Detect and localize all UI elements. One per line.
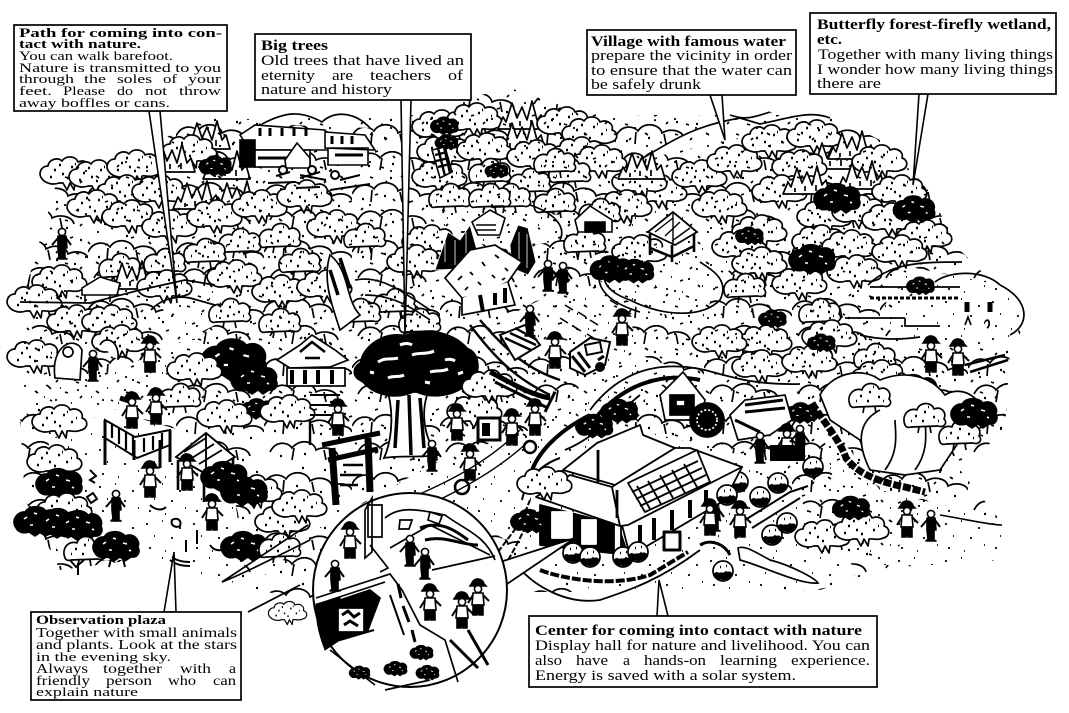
cliff and rocks on right [820, 373, 997, 475]
clearings and dotted paths [30, 200, 1028, 592]
callout: observation plaza: together [103, 661, 163, 676]
callout: butterfly forest firefly wetland: there are [817, 76, 881, 92]
callout: observation plaza: person [106, 673, 152, 688]
forest trees, back rows [7, 101, 952, 393]
callout: observation plaza: who [168, 673, 196, 688]
callout: village with famous water: be safely drunk [591, 77, 702, 93]
callout: center for coming into contact with nature: learning [720, 653, 778, 669]
temple [277, 335, 348, 386]
callout: path for coming into contact with nature: of [163, 71, 178, 86]
callout: path for coming into contact with nature: your [188, 71, 222, 86]
dark forest clumps [199, 117, 937, 423]
left hut statues [54, 336, 161, 381]
left shelter [82, 277, 120, 302]
callout: observation plaza: Observation plaza [36, 612, 167, 627]
wetland [845, 262, 1024, 339]
callout: big trees: Old trees that have lived an [261, 53, 465, 69]
dark bushes by river [576, 399, 638, 438]
callout: butterfly forest firefly wetland: Together with many living things [818, 47, 1053, 63]
callout: observation plaza: explain nature [36, 684, 138, 699]
figures on hill lawn [268, 166, 370, 190]
farm workers and jeep [500, 260, 633, 375]
gazebo on the hillside [648, 212, 697, 262]
callout: big trees: eternity [261, 68, 316, 84]
two people waving on the boardwalk [921, 336, 1008, 375]
callout: path for coming into contact with nature: feet. [19, 83, 52, 98]
plaza people [106, 454, 223, 530]
shrubs beside center building [511, 467, 737, 533]
big tree [354, 330, 502, 458]
callout: village with famous water: prepare the vicinity in order [591, 48, 792, 64]
far hills [262, 112, 830, 160]
callout: village with famous water [587, 30, 796, 140]
gazebo in the plaza [176, 433, 235, 502]
grey line meadow right [940, 515, 1002, 525]
callout: butterfly forest firefly wetland: Butterfly forest-firefly wetland, [817, 17, 1051, 33]
callout: center for coming into contact with nature: a [623, 653, 630, 669]
callout: center for coming into contact with nature [529, 580, 877, 687]
callout: path for coming into contact with nature: soles [117, 71, 152, 86]
callout: center for coming into contact with nature: Display hall for nature and livelihood. You can [535, 638, 871, 654]
callout: path for coming into contact with nature: Path for coming into con- [19, 25, 222, 40]
hedge strip [738, 547, 818, 583]
orchard round trees and fence [705, 457, 940, 581]
callout: path for coming into contact with nature: Nature is transmitted to you [19, 60, 222, 75]
callout: observation plaza: a [229, 661, 236, 676]
far left figure on ridge [52, 228, 71, 259]
callout: path for coming into contact with nature: throw [179, 83, 222, 98]
wooded landscape base [20, 88, 1028, 600]
river bank strip [522, 366, 800, 500]
callout: observation plaza: in the evening sky. [36, 649, 171, 664]
callout: center for coming into contact with nature: also [535, 653, 562, 669]
callout: observation plaza: Always [36, 661, 88, 676]
callout: village with famous water: Village with famous water [591, 34, 787, 50]
leaf speckle texture [22, 88, 1010, 570]
callout: path for coming into contact with nature: Please [63, 83, 105, 98]
callout: butterfly forest firefly wetland [810, 13, 1056, 185]
callout: path for coming into contact with nature: through [19, 71, 75, 86]
observation tower [105, 388, 170, 468]
farther hamlet trees around clearing [339, 183, 747, 338]
callout: path for coming into contact with nature: away boffles or cans. [19, 95, 170, 110]
people in front of exhibits [750, 424, 809, 463]
callout: butterfly forest firefly wetland: etc. [817, 32, 842, 48]
plaza bushes and dark trees [14, 405, 327, 612]
callout: path for coming into contact with nature: not [145, 83, 167, 98]
callout: path for coming into contact with nature: the [84, 71, 106, 86]
callout: path for coming into contact with nature: You can walk barefoot. [19, 48, 173, 63]
log bench row and stream bank [490, 372, 555, 412]
torii gate and stairs [310, 395, 380, 505]
callout: village with famous water: to ensure that the water can [591, 63, 793, 79]
callout: observation plaza: with [180, 661, 211, 676]
callout: path for coming into contact with nature [14, 25, 227, 303]
callout: big trees [255, 34, 471, 335]
callout: path for coming into contact with nature: do [117, 83, 133, 98]
callout: center for coming into contact with nature: experience. [791, 653, 870, 669]
shrubs and people around the big tree [422, 370, 546, 494]
farmhouse with dark conifers [435, 225, 536, 315]
callout: observation plaza [31, 552, 241, 700]
lens circle exhibit view [313, 493, 575, 690]
callout: big trees: nature and history [261, 82, 393, 98]
small foreground tree [222, 540, 310, 625]
lens figures [325, 522, 489, 680]
rock wall foreground [382, 430, 535, 560]
callout: big trees: Big trees [261, 38, 328, 54]
callout: big trees: are [332, 68, 353, 84]
callout: center for coming into contact with nature: Energy is saved with a solar system. [535, 668, 796, 684]
callout: center for coming into contact with nature: have [576, 653, 608, 669]
dark canopy left of temple [159, 339, 315, 433]
callout: big trees: of [448, 68, 463, 84]
plaza animals and pond [87, 470, 230, 566]
callout: observation plaza: can [213, 673, 236, 688]
callout: butterfly forest firefly wetland: I wonder how many living things [817, 62, 1053, 78]
callout: center for coming into contact with nature: hands-on [644, 653, 707, 669]
callout: observation plaza: and plants. Look at the stars [36, 637, 237, 652]
callout: center for coming into contact with nature: Center for coming into contact with nature [535, 623, 863, 639]
callout: observation plaza: Together with small animals [36, 625, 237, 640]
waterwheel building [660, 372, 792, 440]
field furrow dashes [560, 300, 631, 339]
winding stream and paths [20, 205, 723, 395]
lens interior [316, 498, 495, 690]
center building [536, 425, 742, 556]
garden at center front [521, 499, 730, 601]
callout: observation plaza: friendly [36, 673, 90, 688]
winding stream on right [812, 403, 925, 492]
small houses in the hamlet [432, 147, 612, 235]
building: lodge on hill [240, 125, 375, 168]
callout: big trees: teachers [370, 68, 431, 84]
callout: path for coming into contact with nature: tact with nature. [19, 36, 141, 51]
